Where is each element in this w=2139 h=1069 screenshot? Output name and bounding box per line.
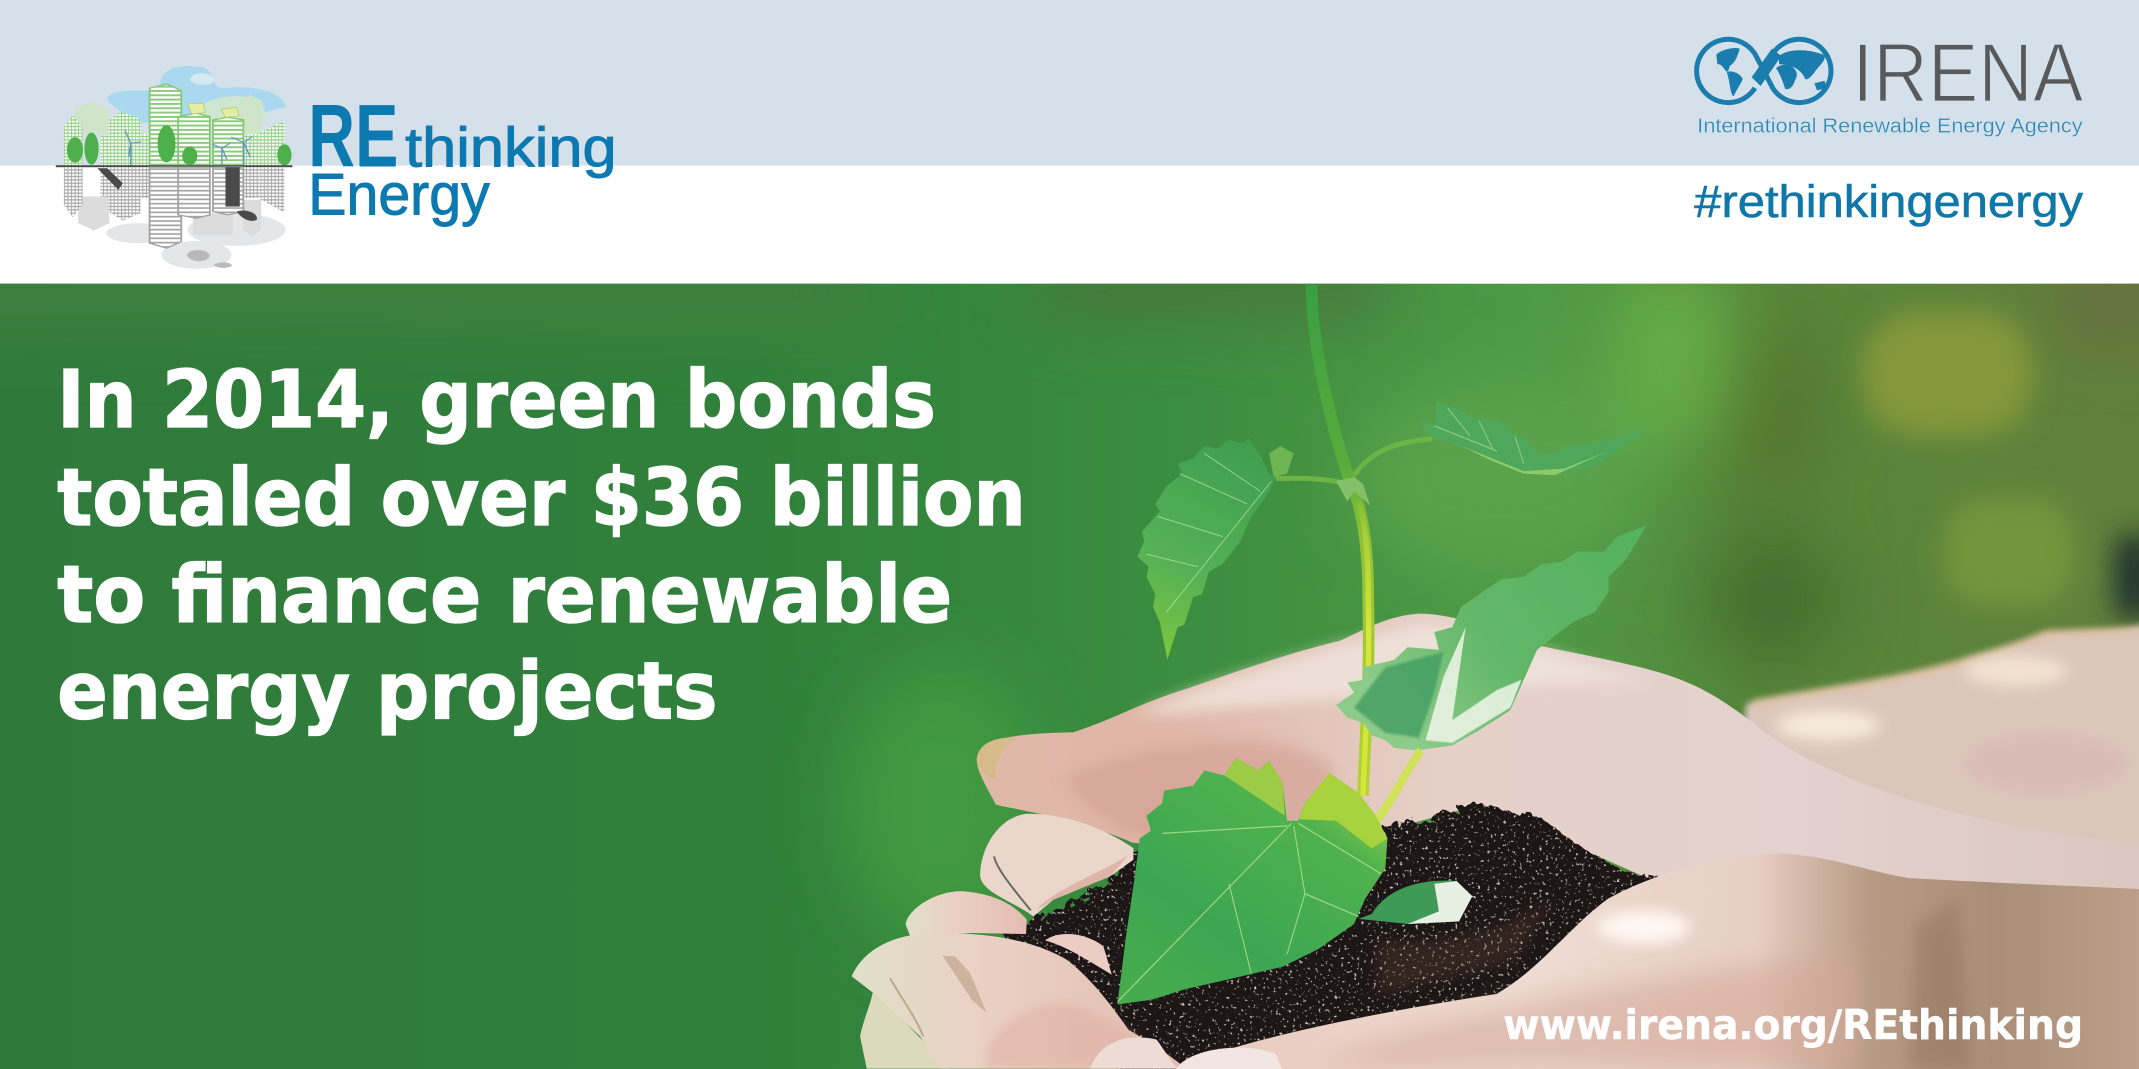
leaf: upper left [1137,438,1294,660]
IRENA wordmark: IRENA [1852,26,2083,120]
stipule [1336,477,1370,505]
logo wordmark: REthinking Energy: thinking [405,115,617,178]
third finger [906,891,1027,936]
top light [1132,624,1651,716]
panel: photo background with seedling in hands [0,252,2139,1069]
fingernail [977,737,1016,780]
solar panels [188,103,239,117]
agency name: International Renewable Energy Agency [1697,115,2083,138]
clouds [107,66,286,123]
headline: to finance renewable [57,549,952,641]
ground line [56,165,292,167]
leaf: upper right [1419,401,1649,475]
grey smog below [106,214,286,269]
palm fold [1045,934,1112,975]
lower right palm [1176,854,2139,1069]
lower left fingers [852,814,1187,1069]
white header strip [0,166,2139,284]
blurred green background [0,252,2139,1069]
headline: totaled over $36 billion [57,452,1026,544]
reflected grey buildings [64,167,284,221]
grey clouds [187,250,232,268]
forearm highlights [1776,656,2128,794]
second finger [980,814,1133,916]
logo wordmark: REthinking Energy: Energy [308,164,490,228]
upper hand fingers [976,614,2044,884]
lime lobes [1225,758,1285,816]
headline: energy projects [57,646,718,738]
hashtag: #rethinkingenergy [1694,176,2084,227]
blurred forearm [1740,620,2139,846]
logo wordmark: REthinking Energy: RE [308,86,398,185]
leaf: lower large [1117,758,1388,1004]
leaf stalk [1376,750,1421,821]
seedling [1117,285,1649,1004]
small leaf in soil [1358,881,1472,924]
petioles [1276,439,1432,484]
wind turbines [125,131,252,166]
thumb tips [1090,1037,1177,1069]
main stem [1312,285,1369,796]
trees [67,125,292,166]
dark reflected structures [97,167,257,221]
lowest finger [860,990,950,1069]
leaf: middle right [1336,525,1646,750]
headline: In 2014, green bonds [57,354,936,446]
thumb [852,933,1187,1069]
green buildings [64,112,284,166]
reflected pale buildings [78,197,261,237]
pale back buildings [75,95,261,133]
logo wordmark: REthinking Energy [308,86,617,228]
icon: infinity globes [1697,39,1831,103]
logo: REthinking Energy city illustration [56,66,292,269]
soil [1003,803,1662,1069]
headline [57,354,1026,738]
url: www.irena.org/REthinking [1503,1001,2083,1049]
finger shading [1072,738,1336,834]
crease lines [943,956,987,1013]
header band [0,0,2139,166]
logo: IRENA [1697,26,2083,138]
